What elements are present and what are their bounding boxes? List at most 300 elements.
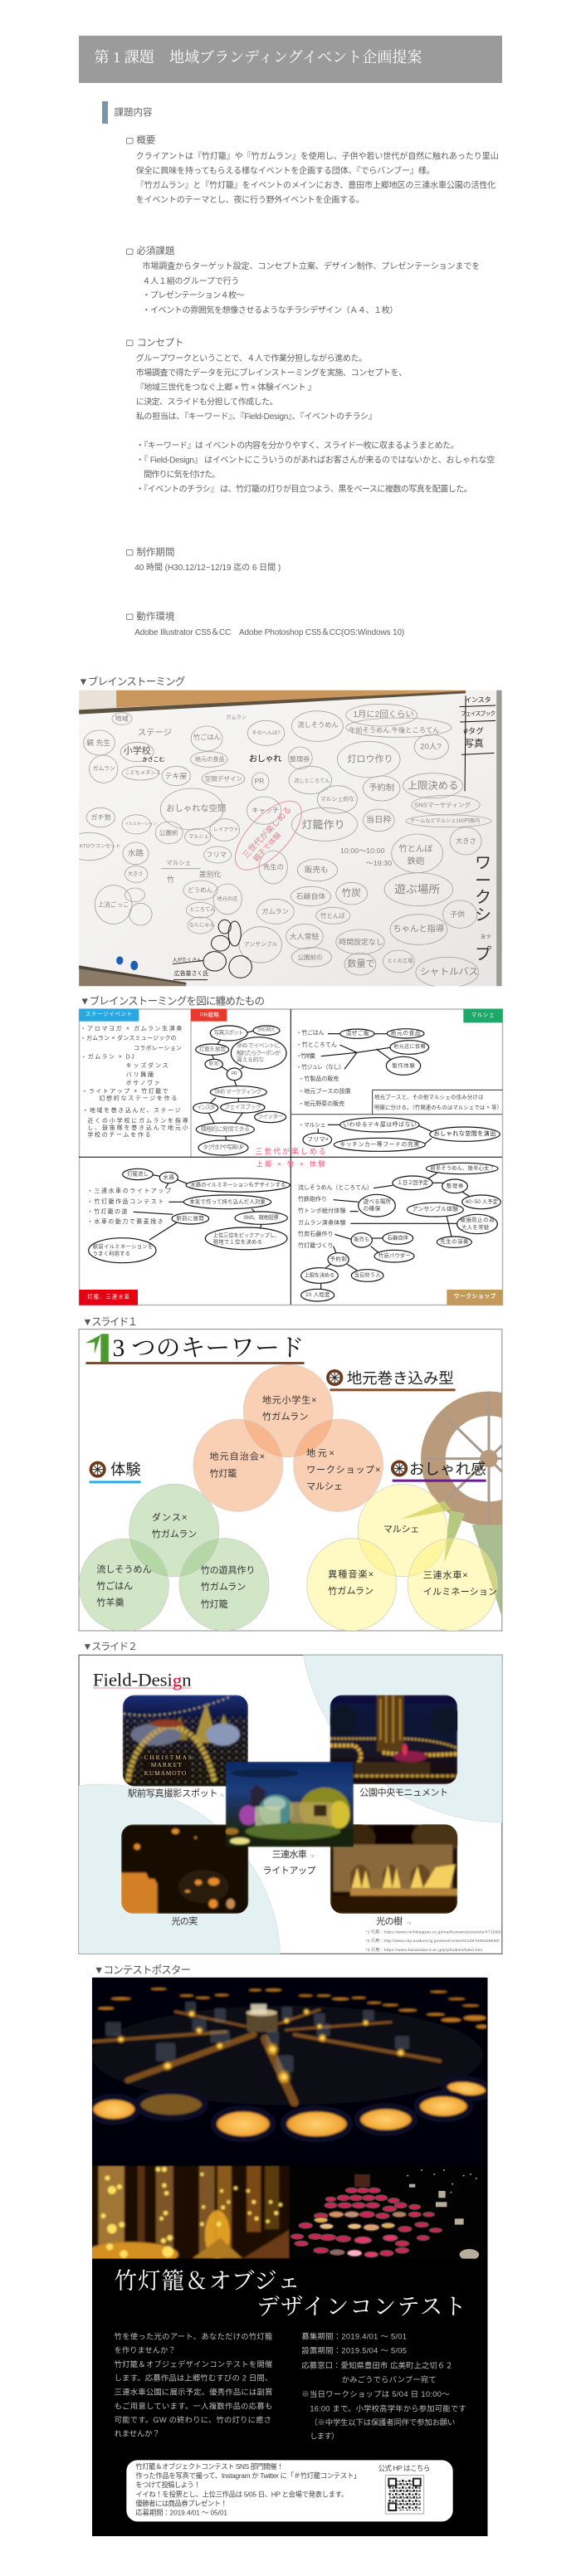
photo: whiteboard brainstorming: ワ [475,854,491,872]
photo: whiteboard brainstorming: 人がたくさん [173,956,202,963]
left diagram panels: stage event, PR, lantern: 駅前イルミネーションを [93,1242,153,1250]
photo: whiteboard brainstorming: 親子で体験 [251,830,283,863]
left diagram panels: stage event, PR, lantern: 積極的に発信できる [201,1125,250,1132]
left diagram panels: stage event, PR, lantern: 上郷 × 竹 × 体験 [256,1160,325,1168]
text block: 制作期間: 制作期間 [136,547,174,558]
source references: *3 引用：https://www.kanazawa-it.ac.jp/prj/tsukimi/kako.htm [366,1947,482,1953]
text block: 概要: 『竹ガムラン』と『竹灯籠』をイベントのメインにおき、豊田市上郷地区の三連水車公園の活性化 [136,179,496,191]
circle labels: 竹灯籠 [201,1598,228,1609]
left diagram panels: stage event, PR, lantern: 学校のチームを作る [87,1130,151,1138]
section heading: 課題内容 [102,101,153,124]
right diagram panels: marche, workshop: ガムラン演奏体験 [298,1218,346,1226]
photo: whiteboard brainstorming: シャトルバス [420,967,478,978]
poster intro text: 可能です。GW の終わりに、竹の灯りに癒さ [115,2415,271,2424]
photo: whiteboard brainstorming: ゲームなどマルシェ100円案内 [410,817,480,824]
photo captions: *3 [408,1921,411,1925]
source references: *2 引用：http://www.city.asakura.lg.jp/www/contents/1297835328630/ [366,1938,500,1944]
photo: whiteboard brainstorming: 大きさ [128,871,143,877]
photo: three water wheels lit up [224,1762,354,1847]
chart: green venn circles [79,1484,269,1632]
left diagram panels: stage event, PR, lantern: 貰える的な [237,1056,264,1063]
photo: whiteboard brainstorming: 流しそうめん [297,720,339,729]
photo: whiteboard brainstorming: 三世代が楽しめる [240,804,294,861]
photo: whiteboard brainstorming: 地元の食品 [195,755,225,763]
photo: whiteboard brainstorming: ガムラン [226,715,247,720]
circle labels: 地元× [306,1447,334,1458]
poster title [115,2268,466,2319]
photo: whiteboard brainstorming: SNSマーケティング [414,801,471,808]
right diagram panels: marche, workshop: 明確に分ける。（竹関連のものはマルシェでは × 等） [374,1103,502,1110]
left diagram panels: stage event, PR, lantern: PR戦略 [200,1011,219,1018]
slide title: 3 つのキーワード [113,1335,304,1362]
right diagram panels: marche, workshop: キッチンカー等フードの充実 [339,1140,419,1148]
photo: whiteboard brainstorming: ク [475,889,491,906]
right diagram panels: marche, workshop: ・竹ジュレ（なし） [296,1063,344,1071]
left diagram panels: stage event, PR, lantern: SNS マーケティング [214,1087,262,1095]
callout: SNS contest box: 作った作品を写真で撮って、Instagram か Twitter に「＃竹灯籠コンテスト」 [135,2471,360,2480]
photo: whiteboard brainstorming: 鉄砲 [408,856,424,866]
circle labels: 竹ごはん [96,1580,133,1592]
right diagram panels: marche, workshop: 破損防止の為 [461,1216,494,1223]
photo captions: ライトアップ [263,1865,316,1876]
poster intro text: 三連水車公園に展示予定。優秀作品には副賞 [115,2388,272,2397]
right diagram panels: marche, workshop: 40~50 人予定 [466,1198,499,1205]
text block: 動作環境: 動作環境 [136,610,175,622]
right diagram panels: marche, workshop: ・竹ところてん [296,1041,337,1048]
photo: whiteboard brainstorming: キャッチ [251,807,279,814]
left diagram panels: stage event, PR, lantern: SNS、現地投票 [243,1213,279,1221]
photo: christmas market: CHRISTMAS [144,1754,192,1761]
circle labels: 竹ガムラン [328,1585,374,1597]
right diagram panels: marche, workshop: の確保 [364,1204,381,1212]
photo: whiteboard brainstorming: 販売も [305,865,329,875]
photo: glowing bamboo forest [91,2165,290,2259]
photo: whiteboard brainstorming: 空間デザイン [205,774,242,783]
text block: コンセプト: グループワークということで、４人で作業分担しながら進めた。 [136,353,367,363]
text block: 制作期間 [126,547,281,573]
circle labels [96,1394,497,1609]
heading: コンテストポスター: ▼コンテストポスター [94,1964,191,1976]
photo: whiteboard brainstorming: レイアウト [213,827,239,832]
circle labels: 竹ガムラン [201,1581,246,1593]
right diagram panels: marche, workshop: 地元店に依頼 [393,1043,426,1050]
poster intro text: れませんか？ [115,2430,160,2438]
photo: whiteboard brainstorming: 写真 [464,738,484,749]
photo: whiteboard brainstorming: プ [475,945,491,964]
photo: whiteboard brainstorming: 親 先生 [86,738,111,747]
callout: SNS contest box: 竹灯籠＆オブジェクトコンテスト SNS 部門開催！ [135,2462,284,2471]
right diagram panels: marche, workshop: アンサンブル体験 [413,1205,458,1212]
section heading: 課題内容: 課題内容 [115,106,153,118]
text block: 必須課題: ・イベントの雰囲気を想像させるようなチラシデザイン（Ａ４、１枚） [142,305,398,315]
photo: whiteboard brainstorming: アンサンブル [244,940,278,948]
photo: whiteboard brainstorming: フリマ [206,851,227,858]
right diagram panels: marche, workshop: 販売も [354,1236,369,1242]
text block: コンセプト: コンセプト [137,337,184,348]
poster intro text [115,2331,272,2438]
right diagram panels: marche, workshop: ・竹羊羹 [296,1051,315,1059]
photo: whiteboard brainstorming: 大きさ [456,837,476,845]
left diagram panels: stage event, PR, lantern: PR [232,1071,238,1076]
left diagram panels: stage event, PR, lantern: 本気で作って持ち込んだ人対象 [189,1198,266,1205]
left diagram panels: stage event, PR, lantern: ・ライトアップ × 竹灯籠で [81,1087,168,1095]
right diagram panels: marche, workshop: 竹鉄砲作り [298,1195,327,1203]
right diagram panels: marche, workshop: 大人を常駐 [461,1223,490,1231]
photo: whiteboard brainstorming: ガムラン [93,764,115,772]
photo: whiteboard brainstorming: 上限決める [408,780,458,792]
left diagram panels: stage event, PR, lantern: コラボレーション [134,1045,182,1051]
photo: whiteboard brainstorming: 先生の [263,863,284,871]
right diagram panels: marche, workshop: 竹炭パウダー [378,1251,411,1259]
right diagram panels: marche, workshop: 流しそうめん（ところてん） [298,1183,373,1191]
chart: yellow venn circles [307,1484,497,1631]
photo: whiteboard brainstorming: ～19:30 [366,859,392,867]
photo: whiteboard brainstorming: 竹とんぼ [320,911,346,920]
right diagram panels: marche, workshop: ・竹製品の販売 [298,1075,339,1082]
callout: SNS contest box [126,2460,453,2521]
photo: whiteboard brainstorming: 公園前 [159,828,178,837]
photo: lantern night [121,1824,248,1914]
photo: whiteboard brainstorming: そのへんは? [251,730,281,736]
left diagram panels: stage event, PR, lantern: 灯籠流し [127,1169,149,1177]
left diagram panels: stage event, PR, lantern: 幻想的なステージを作る [99,1094,177,1101]
photo: whiteboard brainstorming: マルシェ [166,859,191,866]
right diagram panels: marche, workshop: 石鹸自体 [388,1233,409,1241]
left diagram panels: stage event, PR, lantern: インスタ [197,1103,216,1110]
keyword: 体験 [90,1461,141,1483]
left diagram panels: stage event, PR, lantern: 三世代が楽しめる [255,1146,326,1155]
left diagram panels: stage event, PR, lantern: ・地域を巻き込んだ、ステージ [82,1106,181,1114]
photo captions: 三連水車 [272,1848,307,1860]
heading: スライド2: ▼スライド２ [82,1641,138,1652]
keyword: 地元巻き込み型: 地元巻き込み型 [347,1369,454,1387]
right diagram panels: marche, workshop: 地元の食品 [391,1029,421,1037]
right diagram panels: marche, workshop: 竹炭石鹸作り [298,1230,334,1237]
photo: whiteboard brainstorming: なんじゅん [189,923,215,928]
right diagram panels: marche, workshop: 遊べる場所 [364,1198,391,1205]
photo: whiteboard brainstorming: マルシェ [188,834,209,840]
panel: slide 1 three keywords [79,1329,544,1632]
right diagram panels: marche, workshop: 予約制 [330,1255,347,1262]
photo: whiteboard brainstorming: 灯ロウ作り [347,754,393,764]
callout: SNS contest box: イイね！を投票とし、上位三作品は 5/05 日、HP と会場で発表します。 [135,2490,348,2498]
photo: whiteboard brainstorming: ー [475,872,491,890]
photo: whiteboard brainstorming: ちゃんと指導 [393,924,444,934]
photo captions: 公園中央モニュメント [359,1788,448,1798]
photo: whiteboard brainstorming: 小学校 [124,744,151,756]
poster intro text: を作りませんか？ [115,2345,176,2354]
text block: 必須課題: 市場調査からターゲット設定、コンセプト立案、デザイン制作、プレゼンテーションまでを [142,261,480,271]
left diagram panels: stage event, PR, lantern: ボサノヴァ [126,1079,160,1086]
photo: whiteboard brainstorming: とくの工場 [388,958,413,964]
photo: whiteboard brainstorming: #タグ [463,726,484,736]
slide title: Field-Design: Field-Design [93,1670,192,1690]
text block: コンセプト: に決定、スライドも分担して作成した。 [136,397,278,407]
poster text and info box [115,2268,466,2521]
title bar [79,36,502,83]
right diagram panels: marche, workshop: 製作体験 [392,1061,415,1069]
photo: whiteboard brainstorming: ガチ勢 [90,813,111,821]
poster schedule text: します） [310,2432,339,2441]
left diagram panels: stage event, PR, lantern: SNS 映え [257,1027,276,1033]
panel: brainstorm diagram [79,1009,503,1305]
photo: whiteboard brainstorming: 1月に2回くらい [353,710,414,720]
right diagram panels: marche, workshop: 混ぜご飯 [346,1029,369,1037]
heading: ブレインストーミング: ▼ブレインストーミング [78,676,185,688]
photo: pink bamboo cups [290,2165,486,2260]
poster schedule text: 16:00 まで。小学校高学年から参加可能です [310,2403,466,2413]
text block: 概要: 概要 [136,134,155,146]
poster intro text: もご用意しています。一人複数作品の応募も [115,2401,272,2410]
left diagram panels: stage event, PR, lantern: ・ガムラン × DJ [81,1052,134,1060]
poster schedule text [301,2331,466,2441]
poster schedule text: （※中学生以下は保護者同伴で参加お願い [310,2417,455,2427]
photo: whiteboard brainstorming: 竹 [167,874,174,883]
keyword: 地元巻き込み型 [326,1369,456,1391]
circle labels: 竹灯籠 [210,1467,237,1479]
photo captions: *1 [220,1793,224,1798]
circle labels: 地元自治会× [210,1451,265,1462]
photo: whiteboard brainstorming: KTOウコンセット [80,843,120,849]
photo: whiteboard brainstorming: 数量で [347,959,375,969]
photo: whiteboard brainstorming: 竹ごはん [193,733,221,741]
left diagram panels: stage event, PR, lantern: ツイッター [257,1112,283,1120]
photo: whiteboard brainstorming: 上流ごっこ [98,900,129,908]
source references [366,1929,501,1953]
text block: 動作環境: Adobe Illustrator CS5＆CC Adobe Photoshop CS5＆CC(OS:Windows 10) [134,628,404,637]
right diagram panels: marche, workshop: 前半そうめん、後半心太？ [430,1164,495,1171]
left diagram panels: stage event, PR, lantern [79,1009,326,1305]
text block: 概要: クライアントは『竹灯籠』や『竹ガムラン』を使用し、子供や若い世代が自然に触れあったり里山 [136,151,499,161]
photo: whiteboard brainstorming: ところてん [189,907,215,913]
heading: スライド1: ▼スライド１ [82,1316,138,1328]
icon: bamboo [85,1334,109,1363]
poster schedule text: 設置期間：2019.5/04 ～ 5/05 [301,2347,407,2355]
right diagram panels: marche, workshop: ・竹ごはん [296,1028,325,1036]
left diagram panels: stage event, PR, lantern: ・三連水車のライトアップ [87,1187,171,1194]
right diagram panels: marche, workshop: ・マルシェ [298,1121,326,1128]
left diagram panels: stage event, PR, lantern: 水路のイルミネーションもデザインする [190,1180,286,1188]
left diagram panels: stage event, PR, lantern: 上位三位をピックアップし、 [213,1231,280,1238]
photo: whiteboard brainstorming: ガムラン [261,907,289,915]
photo: whiteboard brainstorming: 10:00～10:00 [340,846,385,855]
circle labels: 異種音楽× [328,1568,374,1579]
photo: whiteboard brainstorming: 当日枠 [366,814,392,825]
callout: SNS contest box: 公式 HP はこちら [378,2464,430,2472]
keyword: 体験: 体験 [110,1461,141,1478]
left diagram panels: stage event, PR, lantern: 駅前 [209,1060,219,1066]
photo: whiteboard brainstorming: きさこむ [142,757,165,763]
photo: whiteboard brainstorming: 流しところてん [294,778,330,784]
callout: SNS contest box: をつけて投稿しよう！ [135,2481,201,2489]
photo captions [128,1788,448,1927]
text block: コンセプト: 間作りに気を付けた。 [144,469,220,480]
photo: whiteboard brainstorming: 竹炭 [342,887,361,899]
right diagram panels: marche, workshop: 20 人程度 [305,1290,330,1298]
photo: whiteboard brainstorming: 大人常駐 [290,931,320,940]
left diagram panels: stage event, PR, lantern: ・竹灯籠の道 [87,1208,127,1215]
left diagram panels: stage event, PR, lantern: バリ舞踊 [126,1071,154,1078]
left diagram panels: stage event, PR, lantern: ・ガムラン × ダンスミュージックの [81,1034,177,1042]
icon: QR code [385,2476,424,2514]
photo: whiteboard brainstorming: PR [255,778,264,785]
right diagram panels: marche, workshop: １日２回予定 [398,1179,429,1186]
circle labels: イルミネーション [423,1587,497,1598]
poster schedule text: 応募窓口：愛知県豊田市 広美町上之切６２ [301,2360,453,2369]
chart: orange venn circles [193,1364,383,1511]
photo: bamboo lanterns radial [90,1978,490,2165]
circle labels: 竹ガムラン [152,1528,197,1539]
photo: christmas market [123,1695,248,1787]
left diagram panels: stage event, PR, lantern: 灯籠、三連水車 [87,1292,130,1300]
photo: whiteboard brainstorming: ステージ [138,729,172,738]
right diagram panels: marche, workshop: マルシェ [471,1012,495,1018]
photo: whiteboard brainstorming: インスタ [465,696,491,704]
panel: slide 2 field design [78,1642,503,1954]
text block: コンセプト: 『地域三世代をつなぐ上郷 × 竹 × 体験イベント 』 [136,382,316,393]
text block: コンセプト [126,337,495,495]
text block: コンセプト: ・『イベントのチラシ』 は、竹灯籠の灯りが目立つよう、黒をベースに複数の写真を配置した。 [136,483,472,495]
photo: whiteboard brainstorming: 差別化 [199,869,222,878]
heading: ブレインストーミングを図に纏めたもの: ▼ブレインストーミングを図に纏めたもの [80,995,265,1007]
photo: whiteboard brainstorming: 石鹸自体 [296,891,326,900]
right diagram panels: marche, workshop: 上限を決める [305,1271,334,1278]
left diagram panels: stage event, PR, lantern: フェイスブック [224,1103,261,1110]
left diagram panels: stage event, PR, lantern: し、鼓笛隊を巻き込んで地元小 [87,1124,188,1131]
left diagram panels: stage event, PR, lantern: 駅前に展開 [176,1214,204,1222]
photo: whiteboard brainstorming: おしゃれな空間 [166,804,226,813]
poster: contest [83,1978,490,2536]
source references: *1 引用：https://www.nichiinjapan.co.jp/mai/kumamoto/article/471566/ [366,1929,501,1934]
callout: SNS contest box: 優勝者には商品券プレゼント！ [135,2499,227,2507]
text block: 概要 [126,134,499,205]
photo: whiteboard brainstorming: 水路 [128,848,144,858]
right diagram panels: marche, workshop: いわゆるテキ屋は呼ばない [343,1120,417,1128]
text block: コンセプト: ・『 Field-Design』 はイベントにこういうのがあればお客さんが来るのではないかと、おしゃれな空 [136,455,495,465]
circle labels: 地元小学生× [262,1394,317,1406]
right diagram panels: marche, workshop: 竹トンボ絵付体験 [298,1207,346,1214]
right diagram panels: marche, workshop: おしゃれな空間を演出 [434,1129,496,1137]
photo: christmas market: KUMAMOTO [144,1769,187,1777]
left diagram panels: stage event, PR, lantern: タグ付けや写真 UP [203,1143,244,1150]
left diagram panels: stage event, PR, lantern: うまく利用する [93,1249,130,1256]
circle labels: 三連水車× [423,1569,468,1580]
photo: whiteboard brainstorming: 公園前の [297,953,323,961]
photo: whiteboard brainstorming: フェイスブック [461,710,496,717]
left diagram panels: stage event, PR, lantern: キッズダンス [126,1061,168,1069]
photo: whiteboard brainstorming: マルシェ的な [320,795,354,803]
left diagram panels: stage event, PR, lantern: 写真スポット [214,1028,244,1036]
photo: park monument [330,1695,464,1784]
poster intro text: します。応募作品は上郷竹むすびの 2 日間、 [115,2374,272,2383]
poster title: 竹灯籠＆オブジェ [115,2268,300,2293]
circle labels: 流しそうめん [96,1564,152,1574]
photo: whiteboard brainstorming: 整理券 [290,755,310,763]
text block: 概要: をイベントのテーマとし、夜に行う野外イベントを企画する。 [136,194,364,205]
poster schedule text: ※当日ワークショップは 5/04 日 10:00～ [301,2389,450,2398]
photo: whiteboard brainstorming: ョッ [480,934,491,939]
poster schedule text: かみごうでらバンブー宛て [342,2375,437,2384]
photo: whiteboard brainstorming: 遊ぶ場所 [394,883,441,895]
left diagram panels: stage event, PR, lantern: ・アロマヨガ × ガムラン生演奏 [81,1024,182,1032]
text block: 概要: 保全に興味を持ってもらえる様なイベントを企画する団体、『でらバンブー』様。 [136,165,435,176]
circle labels: マルシェ [383,1525,419,1534]
photo: whiteboard brainstorming: 予約制 [369,783,394,793]
photo captions: 駅前写真撮影スポット [128,1788,218,1799]
text block: 動作環境 [126,610,404,637]
left diagram panels: stage event, PR, lantern: ・竹灯籠作品コンテスト [87,1198,164,1205]
left diagram panels: stage event, PR, lantern: SNS でイベントに [237,1042,281,1049]
text block: 必須課題: 必須課題 [136,245,175,256]
photo: whiteboard brainstorming: どうめん [188,886,213,894]
photo: whiteboard brainstorming: 灯籠作り [302,818,345,831]
photo: whiteboard brainstorming: 20人? [420,743,442,751]
photo: whiteboard brainstorming: シ [475,906,491,925]
left diagram panels: stage event, PR, lantern: 水路 [164,1173,175,1180]
photo: whiteboard brainstorming: 地元の店 [217,895,237,902]
poster schedule text: 募集期間：2019.4/01 ～ 5/01 [301,2331,407,2340]
text block: 必須課題: ・プレゼンテーション４枚～ [142,290,244,300]
photo: whiteboard brainstorming: 地域 [115,715,129,722]
right diagram panels: marche, workshop: 整理券 [447,1182,464,1189]
text block: 必須課題 [126,245,480,315]
left diagram panels: stage event, PR, lantern: ステージイベント [85,1011,132,1017]
text block: コンセプト: ・『キーワード』は イベントの内容を分かりやすく、スライド一枚に収まるようまとめた。 [136,440,459,451]
callout: SNS contest box: 応募期間：2019.4/01 ～ 05/01 [135,2509,227,2517]
text block: 必須課題: ４人１組のグループで行う [142,276,239,286]
photo: whiteboard brainstorming: 竹とんぼ [398,843,433,854]
text block: 制作期間: 40 時間 (H30.12/12~12/19 迄の 6 日間 ) [134,562,281,573]
circle labels: 竹ガムラン [262,1411,309,1422]
right diagram panels: marche, workshop: 地元ブースと、その他マルシェの住み分けは [374,1093,484,1100]
photo: tree of light [330,1824,458,1914]
photo captions: 光の実 [171,1915,198,1927]
icon: water wheel background [401,1391,502,1617]
right diagram panels: marche, workshop: ・地元ブースの設置 [298,1087,351,1095]
right diagram panels: marche, workshop: 当日枠５人 [354,1271,381,1278]
circle labels: ダンス× [152,1511,188,1523]
right diagram panels: marche, workshop [296,1009,503,1305]
left diagram panels: stage event, PR, lantern: 現地で１位を決める [213,1237,262,1245]
photo captions: 光の樹 [376,1915,403,1927]
circle labels: マルシェ [306,1481,343,1491]
photo: whiteboard brainstorming: テキ屋 [165,772,188,780]
photo: whiteboard brainstorming: 広告量さく氏 [174,969,208,977]
photo: whiteboard brainstorming: おしゃれ [249,754,281,764]
poster intro text: 竹を使った光のアート、あなただけの竹灯籠 [115,2331,272,2340]
photo: whiteboard brainstorming: こどもメダンス [124,769,161,776]
circle labels: 竹羊羹 [96,1597,124,1608]
right diagram panels: marche, workshop: フリマ× [307,1136,329,1143]
photo: whiteboard brainstorming: 子供 [450,910,465,919]
right diagram panels: marche, workshop: 竹灯籠づくり [298,1242,334,1249]
left diagram panels: stage event, PR, lantern: ・水車の動力で蕎麦挽き [87,1217,164,1225]
photo: christmas market: MARKET [151,1761,182,1769]
text block: コンセプト: 私の担当は、『キーワード』、『Field-Design』、『イベントのチラシ』 [136,411,377,422]
photo captions: *2 [310,1854,315,1858]
photo: whiteboard brainstorming: 時間設定なし [339,938,383,946]
poster title: デザインコンテスト [256,2294,466,2319]
text block: コンセプト: 市場調査で得たデータを元にブレインストーミングを実施、コンセプトを、 [136,367,407,378]
right diagram panels: marche, workshop: ・地元野菜の販売 [298,1100,344,1107]
left diagram panels: stage event, PR, lantern: 近くの小学校にガムランを指導 [87,1116,188,1124]
left diagram panels: stage event, PR, lantern: 触れたらクーポンが [237,1049,281,1056]
right diagram panels: marche, workshop: 先生の演奏 [440,1237,469,1245]
keyword: おしゃれ感: おしゃれ感 [409,1461,486,1478]
photo: whiteboard brainstorming [65,690,502,988]
right diagram panels: marche, workshop: ワークショップ [454,1292,496,1300]
circle labels: ワークショップ× [306,1464,381,1475]
